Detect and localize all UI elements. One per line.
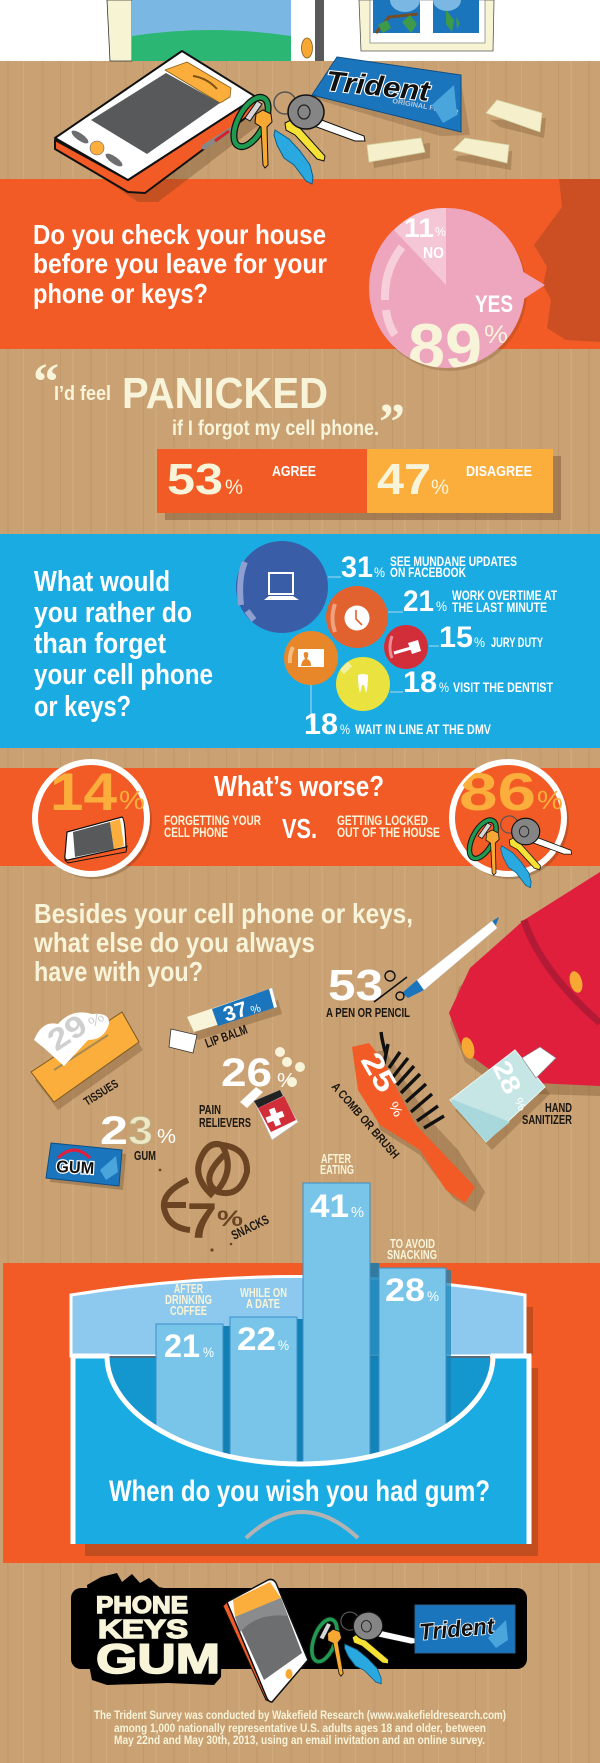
- panel: panicked quote: [33, 354, 561, 520]
- comparison labels: FORGETTING YOUR: [164, 812, 261, 828]
- heading: your cell phone: [34, 659, 213, 691]
- bar: to avoid snacking 28%: [379, 1236, 451, 1468]
- quote text: PANICKED: [122, 369, 328, 418]
- heading: What would: [34, 566, 170, 598]
- bar: to avoid snacking 28%: 28: [385, 1272, 425, 1308]
- item: pain relievers 26%: RELIEVERS: [199, 1115, 251, 1130]
- label: 89% yes: [410, 295, 512, 368]
- icon: gavel bubble: [384, 625, 428, 669]
- comparison labels: GETTING LOCKED: [337, 812, 428, 828]
- item: lip balm 37%: %: [249, 1002, 263, 1017]
- bar: to avoid snacking 28%: %: [427, 1288, 439, 1304]
- label: 11% no: NO: [423, 245, 444, 262]
- door with view outside: [107, 0, 324, 61]
- item: tissues 29%: 29: [42, 1008, 93, 1058]
- quote text: ”: [379, 394, 405, 451]
- profile face silhouette: [534, 179, 600, 342]
- item: comb or brush 25%: %: [385, 1098, 407, 1119]
- bar: agree vs disagree: DISAGREE: [466, 463, 532, 480]
- item: gum 23%: 2: [100, 1109, 128, 1153]
- bar: agree vs disagree: [157, 449, 561, 520]
- comparison labels: VS.: [282, 813, 317, 844]
- stat: 18% dentist: 18: [403, 666, 437, 699]
- pocket front: [73, 1356, 529, 1544]
- heading: besides your phone or keys: [33, 898, 413, 987]
- circle: 86% keys: 86: [459, 763, 536, 822]
- item: tissues 29%: [31, 1008, 143, 1110]
- item: gum 23%: %: [157, 1126, 176, 1148]
- pocket shadow: [85, 1307, 538, 1556]
- heading: check your house question: before you leave for your: [33, 248, 327, 279]
- icon: gum pack: [415, 1605, 515, 1653]
- icon: phone: [55, 51, 268, 202]
- bar chart: [156, 1151, 451, 1479]
- chart: bubble gum pie: [369, 208, 545, 383]
- footer: survey note: May 22nd and May 30th, 2013, using an email invitation and an online survey.: [114, 1733, 485, 1747]
- icon: keys: [227, 92, 365, 184]
- circle: 86% keys: [452, 762, 572, 888]
- bar: agree vs disagree: 47: [377, 455, 431, 504]
- icon: clock bubble: [326, 586, 388, 648]
- circle: 86% keys: %: [537, 785, 563, 815]
- item: tissues 29%: TISSUES: [81, 1077, 121, 1109]
- icon: tooth bubble: [336, 657, 390, 711]
- label: 11% no: 11: [404, 213, 434, 243]
- stat: 18% dentist: %: [439, 679, 449, 695]
- heading: besides your phone or keys: have with you?: [34, 956, 203, 987]
- icon: keys: [301, 1603, 424, 1694]
- stat: 31% mundane updates: %: [374, 564, 385, 580]
- bar: after eating 41%: 41: [310, 1188, 349, 1224]
- icon: ID card bubble: [284, 631, 338, 685]
- stat: 21% overtime: [403, 585, 557, 618]
- panel: what's worse band: [0, 762, 600, 888]
- item: pain relievers 26%: %: [277, 1070, 296, 1092]
- icon: red bag: [449, 872, 600, 1096]
- item: hand sanitizer 28%: [450, 1047, 572, 1150]
- quote text: “: [33, 354, 59, 411]
- item: gum 23%: GUM: [134, 1148, 156, 1163]
- quote text: if I forgot my cell phone.: [172, 417, 379, 440]
- stat: 21% overtime: 21: [403, 585, 434, 618]
- heading: When do you wish you had gum?: [109, 1475, 490, 1508]
- bar: after drinking coffee 21%: COFFEE: [170, 1303, 207, 1318]
- item: hand sanitizer 28%: SANITIZER: [522, 1112, 572, 1127]
- panel: what would you rather do: [0, 534, 600, 748]
- stat: 31% mundane updates: ON FACEBOOK: [390, 564, 466, 580]
- item: comb or brush 25%: [329, 1032, 485, 1212]
- item: pain relievers 26%: 26: [221, 1051, 272, 1095]
- item: snacks 7%: [159, 1144, 271, 1252]
- bar: after drinking coffee 21%: DRINKING: [165, 1292, 212, 1307]
- icon: gum sticks: [367, 100, 546, 170]
- stat: 31% mundane updates: [341, 551, 517, 584]
- starburst logo: KEYS: [98, 1614, 188, 1644]
- item: snacks 7%: SNACKS: [229, 1212, 271, 1243]
- label: 89% yes: YES: [475, 291, 513, 318]
- bar: after drinking coffee 21%: AFTER: [174, 1281, 203, 1296]
- stat: 18% dentist: [403, 666, 553, 699]
- footer: survey note: The Trident Survey was conducted by Wakefield Research (www.wakefieldresearch.com): [94, 1708, 506, 1722]
- icon: gum pack: ORIGINAL FLAVOR: [392, 98, 459, 117]
- quote text: [33, 354, 405, 451]
- heading: or keys?: [34, 691, 131, 723]
- bar: agree vs disagree: %: [431, 476, 449, 499]
- panel: check your house band: [0, 179, 600, 349]
- bar: after drinking coffee 21%: 21: [164, 1328, 200, 1364]
- window: [359, 0, 494, 51]
- heading: check your house question: phone or keys?: [33, 278, 208, 309]
- item: gum 23%: GUM: [56, 1157, 95, 1178]
- heading: you rather do: [34, 597, 192, 629]
- item: pen 53%: A PEN OR PENCIL: [326, 1005, 410, 1020]
- stat: 31% mundane updates: 31: [341, 551, 373, 584]
- starburst logo: GUM: [96, 1635, 220, 1682]
- stat: 18% DMV: [304, 708, 492, 741]
- item: lip balm 37%: [169, 988, 282, 1053]
- stat: 18% DMV: %: [340, 721, 350, 737]
- bar: after drinking coffee 21%: [156, 1281, 230, 1476]
- pocket back: [71, 1276, 525, 1356]
- stat: 21% overtime: WORK OVERTIME AT: [452, 587, 557, 603]
- bar: after eating 41%: AFTER: [321, 1151, 351, 1166]
- logo bar: phone keys gum: [71, 1573, 527, 1702]
- bar: while on a date 22%: WHILE ON: [240, 1285, 287, 1300]
- item: hand sanitizer 28%: %: [511, 1095, 530, 1113]
- stat: 15% jury duty: JURY DUTY: [491, 634, 543, 650]
- bar: while on a date 22%: 22: [237, 1321, 276, 1357]
- heading: besides your phone or keys: Besides your cell phone or keys,: [34, 898, 413, 929]
- bar: while on a date 22%: [230, 1285, 303, 1479]
- stat: 18% DMV: 18: [304, 708, 338, 741]
- item: hand sanitizer 28%: HAND: [545, 1100, 572, 1115]
- bar: to avoid snacking 28%: SNACKING: [387, 1247, 437, 1262]
- icon: gum pack: [312, 57, 470, 136]
- item: lip balm 37%: 37: [220, 997, 250, 1027]
- heading: besides your phone or keys: what else do you always: [33, 927, 315, 958]
- stat: 15% jury duty: 15: [439, 621, 473, 654]
- bar: after eating 41%: %: [351, 1204, 364, 1221]
- item: comb or brush 25%: A COMB OR BRUSH: [329, 1080, 402, 1161]
- comparison labels: OUT OF THE HOUSE: [337, 824, 440, 840]
- footer: survey note: [94, 1708, 506, 1747]
- item: snacks 7%: %: [217, 1206, 243, 1231]
- stat: 31% mundane updates: SEE MUNDANE UPDATES: [390, 553, 517, 569]
- house scene: [0, 0, 600, 61]
- item: lip balm 37%: LIP BALM: [203, 1022, 249, 1051]
- circle: 14% phone: [35, 762, 152, 879]
- icon: phone: [223, 1579, 308, 1702]
- item: tissues 29%: %: [85, 1008, 107, 1031]
- label: 11% no: %: [435, 224, 446, 239]
- stat: 18% DMV: WAIT IN LINE AT THE DMV: [355, 721, 492, 737]
- panel: when do you wish you had gum: [3, 1151, 600, 1563]
- bar: agree vs disagree: %: [225, 476, 243, 499]
- item: pen 53%: [326, 917, 499, 1020]
- heading: check your house question: [33, 219, 327, 309]
- stat: 18% dentist: VISIT THE DENTIST: [453, 679, 553, 695]
- comparison labels: [164, 812, 440, 844]
- bar: after eating 41%: EATING: [320, 1162, 354, 1177]
- label: 89% yes: %: [484, 321, 508, 349]
- quote text: I’d feel: [54, 383, 111, 405]
- stat: 21% overtime: %: [436, 598, 447, 614]
- starburst logo: PHONE: [96, 1592, 188, 1619]
- heading: [34, 566, 213, 723]
- bar: while on a date 22%: A DATE: [246, 1296, 280, 1311]
- heading: check your house question: Do you check your house: [33, 219, 326, 250]
- label: 11% no: [404, 213, 446, 262]
- connector lines: [311, 577, 439, 725]
- bar: after drinking coffee 21%: %: [203, 1344, 214, 1360]
- item: snacks 7%: 7: [187, 1193, 217, 1249]
- stat: 15% jury duty: [439, 621, 543, 654]
- bar: while on a date 22%: %: [278, 1337, 289, 1353]
- bar: after eating 41%: [303, 1151, 379, 1479]
- label: 89% yes: 89: [408, 310, 482, 383]
- bar: agree vs disagree: AGREE: [272, 463, 316, 480]
- icon: gum pack: Trident: [324, 65, 433, 107]
- item: hand sanitizer 28%: 28: [487, 1056, 528, 1098]
- footer: survey note: among 1,000 nationally representative U.S. adults ages 18 and older, between: [114, 1721, 486, 1735]
- stat: 21% overtime: THE LAST MINUTE: [452, 599, 547, 615]
- starburst logo: [73, 1573, 222, 1685]
- item: gum 23%: [46, 1109, 176, 1190]
- bar: to avoid snacking 28%: TO AVOID: [390, 1236, 435, 1251]
- icon: laptop bubble: [236, 541, 328, 633]
- heading: than forget: [34, 628, 166, 660]
- item: gum 23%: 3: [128, 1109, 153, 1153]
- pocket stitch arc: [246, 1512, 358, 1538]
- comparison labels: CELL PHONE: [164, 824, 228, 840]
- item: comb or brush 25%: 25: [354, 1047, 403, 1098]
- heading: What’s worse?: [214, 771, 384, 803]
- circle: 14% phone: 14: [50, 763, 118, 822]
- bar: agree vs disagree: 53: [167, 455, 223, 504]
- icon: gum pack: Trident: [418, 1612, 496, 1645]
- items on table: [55, 51, 546, 202]
- stat: 15% jury duty: %: [474, 634, 485, 650]
- circle: 14% phone: %: [119, 785, 145, 815]
- item: pain relievers 26%: [199, 1047, 305, 1140]
- item: pain relievers 26%: PAIN: [199, 1102, 221, 1117]
- item: pen 53%: 53: [328, 961, 383, 1010]
